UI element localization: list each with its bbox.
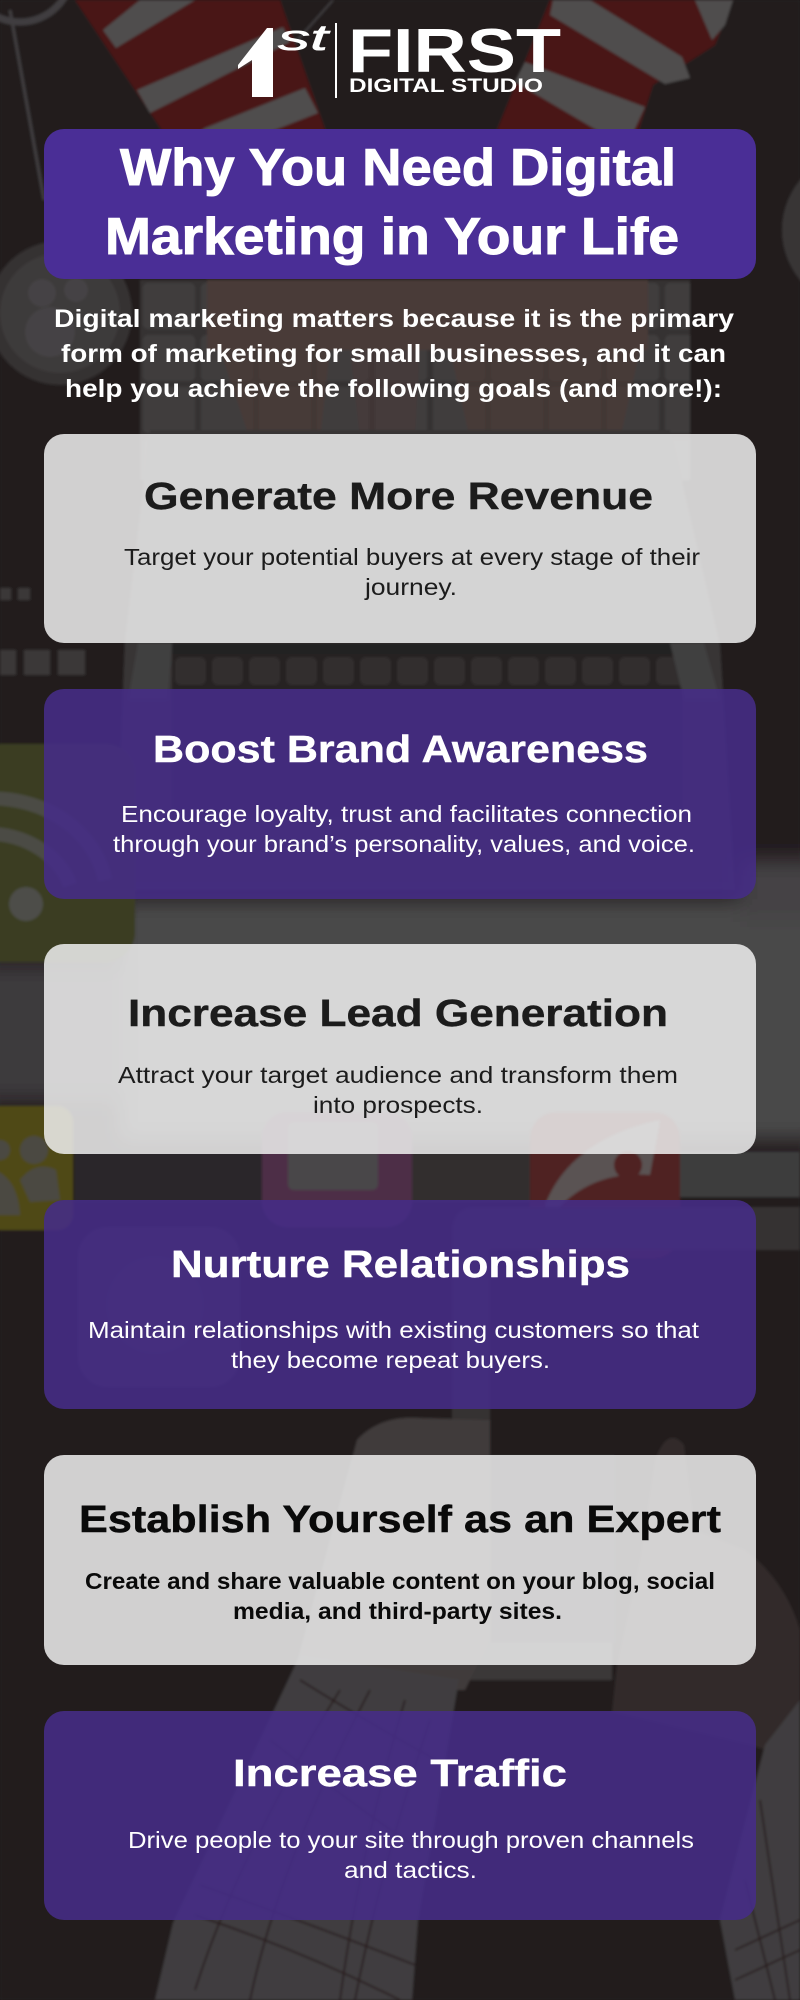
panel: establish yourself as an expert bbox=[44, 1455, 756, 1665]
icon: red rocket bbox=[530, 1112, 680, 1258]
body text bbox=[128, 1827, 694, 1883]
device in hands bbox=[459, 1455, 612, 1680]
top-left dial and cable bbox=[0, 0, 333, 200]
right hand bbox=[612, 1438, 800, 1760]
body text: through your brand’s personality, values, and voice. bbox=[113, 831, 695, 857]
body text: media, and third-party sites. bbox=[233, 1598, 562, 1624]
right sleeve bbox=[495, 0, 733, 135]
body text: they become repeat buyers. bbox=[231, 1347, 550, 1373]
logo wordmark: FIRST bbox=[348, 17, 561, 86]
fog bbox=[0, 860, 800, 1140]
left hand bbox=[290, 1418, 490, 1690]
intro text: form of marketing for small businesses, and it can bbox=[61, 340, 726, 368]
panel: nurture relationships bbox=[44, 1200, 756, 1409]
panel: generate more revenue bbox=[44, 434, 756, 643]
heading: Increase Lead Generation bbox=[128, 993, 668, 1035]
laptop keyboard upper bbox=[140, 280, 690, 480]
body text: Encourage loyalty, trust and facilitates connection bbox=[121, 801, 692, 827]
body text: Attract your target audience and transform them bbox=[118, 1062, 678, 1088]
logo divider bbox=[335, 23, 337, 98]
left controller dial bbox=[0, 241, 132, 385]
heading: Generate More Revenue bbox=[144, 476, 653, 518]
icon: camera tile bbox=[78, 1227, 240, 1387]
body text: into prospects. bbox=[313, 1092, 483, 1118]
logo mark: st: st bbox=[278, 17, 332, 58]
left sleeve bbox=[75, 0, 327, 135]
body text bbox=[124, 544, 700, 600]
intro text bbox=[54, 305, 734, 403]
logo bbox=[238, 17, 561, 98]
icon: pink folder bbox=[262, 1112, 412, 1227]
left tiles bbox=[0, 588, 85, 675]
icon: wifi on green bbox=[0, 744, 135, 962]
title: Why You Need Digital bbox=[120, 139, 676, 197]
body text: and tactics. bbox=[344, 1857, 477, 1883]
heading: Increase Traffic bbox=[233, 1753, 567, 1795]
intro text: help you achieve the following goals (and more!): bbox=[65, 375, 722, 403]
panel: boost brand awareness bbox=[44, 689, 756, 899]
laptop body bbox=[115, 430, 735, 890]
body text bbox=[88, 1317, 700, 1373]
heading: Nurture Relationships bbox=[171, 1244, 630, 1286]
title panel bbox=[44, 129, 756, 279]
title bbox=[105, 139, 679, 266]
body text: Create and share valuable content on your blog, social bbox=[85, 1568, 715, 1594]
logo mark: numeral 1 bbox=[238, 28, 273, 97]
heading: Establish Yourself as an Expert bbox=[79, 1499, 721, 1541]
body text: Target your potential buyers at every stage of their bbox=[124, 544, 700, 570]
body text bbox=[85, 1568, 715, 1624]
body text: Maintain relationships with existing customers so that bbox=[88, 1317, 700, 1343]
icon: social tile bbox=[452, 1207, 800, 1440]
panel: increase traffic bbox=[44, 1711, 756, 1920]
title: Marketing in Your Life bbox=[105, 208, 679, 266]
icon: yellow bbox=[0, 1106, 73, 1230]
body text: journey. bbox=[364, 574, 457, 600]
hands on keyboard bbox=[207, 280, 648, 440]
body text: Drive people to your site through proven channels bbox=[128, 1827, 694, 1853]
body text bbox=[113, 801, 695, 857]
right plaid sleeve bbox=[720, 1700, 800, 2000]
intro text: Digital marketing matters because it is the primary bbox=[54, 305, 734, 333]
heading: Boost Brand Awareness bbox=[153, 729, 648, 771]
right disc bbox=[782, 152, 800, 308]
left plaid sleeve bbox=[155, 1655, 459, 2000]
body text bbox=[118, 1062, 678, 1118]
panel: increase lead generation bbox=[44, 944, 756, 1154]
logo tagline: DIGITAL STUDIO bbox=[349, 76, 543, 97]
